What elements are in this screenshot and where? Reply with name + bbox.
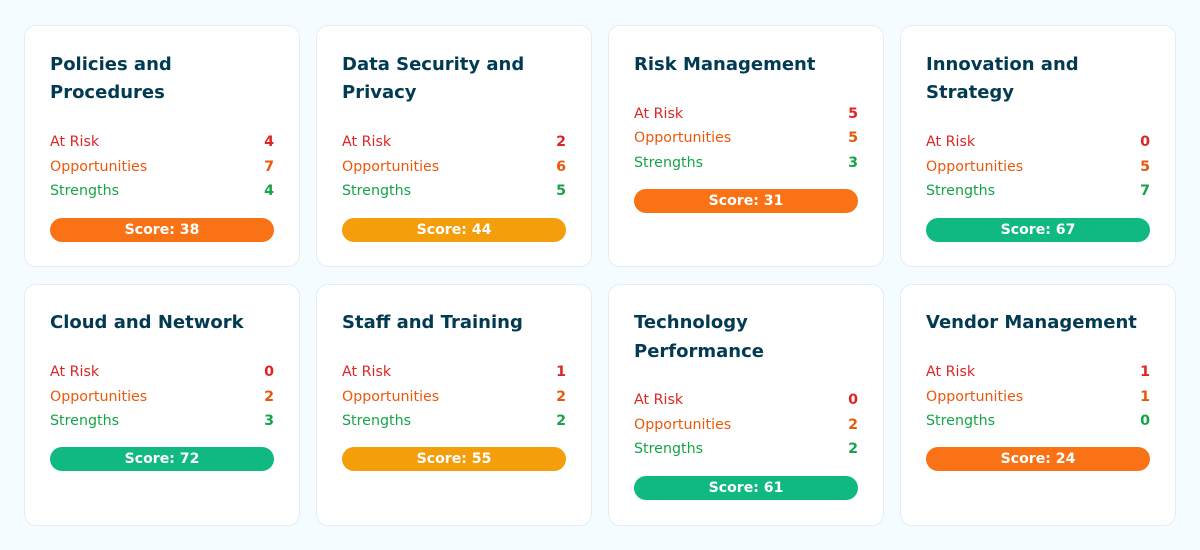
panel: Policies and Procedures	[24, 25, 300, 267]
panel: Data Security and Privacy: 6	[556, 159, 566, 175]
panel: Technology Performance: 2	[848, 417, 858, 433]
panel: Innovation and Strategy: Score: 67	[1001, 222, 1075, 238]
panel: Data Security and Privacy	[316, 25, 592, 267]
panel: Data Security and Privacy: At Risk	[342, 134, 391, 150]
panel: Technology Performance	[608, 284, 884, 526]
panel: Risk Management: At Risk	[634, 106, 683, 122]
panel: Vendor Management: 0	[1140, 413, 1150, 429]
panel: Risk Management: Strengths	[634, 155, 703, 171]
panel: Data Security and Privacy: Score: 44	[417, 222, 491, 238]
panel: Vendor Management: Vendor Management	[926, 312, 1137, 333]
panel: Innovation and Strategy: Opportunities	[926, 159, 1023, 175]
panel: Staff and Training: Opportunities	[342, 389, 439, 405]
panel: Staff and Training: 1	[556, 364, 566, 380]
panel: Data Security and Privacy: 5	[556, 183, 566, 199]
panel: Staff and Training	[316, 284, 592, 526]
panel: Innovation and Strategy: 0	[1140, 134, 1150, 150]
panel: Vendor Management: Score: 24	[1001, 451, 1075, 467]
panel: Cloud and Network: 2	[264, 389, 274, 405]
panel: Vendor Management: 1	[1140, 389, 1150, 405]
panel: Risk Management	[608, 25, 884, 267]
panel: Innovation and Strategy: Strengths	[926, 183, 995, 199]
panel: Policies and Procedures: 4	[264, 134, 274, 150]
panel: Cloud and Network: At Risk	[50, 364, 99, 380]
panel: Policies and Procedures: At Risk	[50, 134, 99, 150]
panel: Staff and Training: 2	[556, 413, 566, 429]
panel: Innovation and Strategy	[900, 25, 1176, 267]
panel: Vendor Management: At Risk	[926, 364, 975, 380]
panel: Risk Management: Score: 31	[709, 193, 783, 209]
panel: Staff and Training: Score: 55	[417, 451, 491, 467]
panel: Technology Performance: 0	[848, 392, 858, 408]
panel: Vendor Management: Strengths	[926, 413, 995, 429]
panel: Cloud and Network: Strengths	[50, 413, 119, 429]
panel: Staff and Training: 2	[556, 389, 566, 405]
panel: Risk Management: 5	[848, 130, 858, 146]
panel: Technology Performance: 2	[848, 441, 858, 457]
panel: Risk Management: Risk Management	[634, 54, 815, 75]
panel: Innovation and Strategy: At Risk	[926, 134, 975, 150]
panel: Technology Performance: Technology Performance	[634, 312, 764, 362]
panel: Cloud and Network: Opportunities	[50, 389, 147, 405]
panel: Policies and Procedures: 4	[264, 183, 274, 199]
panel: Innovation and Strategy: Innovation and Strategy	[926, 54, 1079, 103]
panel: Risk Management: 5	[848, 106, 858, 122]
panel: Risk Management: Opportunities	[634, 130, 731, 146]
panel: Technology Performance: Score: 61	[709, 480, 783, 496]
panel: Data Security and Privacy: Strengths	[342, 183, 411, 199]
panel: Cloud and Network: Score: 72	[125, 451, 199, 467]
panel: Cloud and Network: 3	[264, 413, 274, 429]
panel: Vendor Management: 1	[1140, 364, 1150, 380]
panel: Cloud and Network: 0	[264, 364, 274, 380]
panel: Technology Performance: At Risk	[634, 392, 683, 408]
panel: Vendor Management	[900, 284, 1176, 526]
panel: Data Security and Privacy: Data Security and Privacy	[342, 54, 524, 103]
panel: Cloud and Network: Cloud and Network	[50, 312, 244, 333]
panel: Policies and Procedures: Policies and Procedures	[50, 54, 172, 103]
panel: Innovation and Strategy: 7	[1140, 183, 1150, 199]
panel: Policies and Procedures: 7	[264, 159, 274, 175]
panel: Policies and Procedures: Strengths	[50, 183, 119, 199]
panel: Staff and Training: Staff and Training	[342, 312, 523, 333]
panel: Cloud and Network	[24, 284, 300, 526]
panel: Policies and Procedures: Score: 38	[125, 222, 199, 238]
panel: Policies and Procedures: Opportunities	[50, 159, 147, 175]
panel: Data Security and Privacy: 2	[556, 134, 566, 150]
panel: Technology Performance: Strengths	[634, 441, 703, 457]
panel: Risk Management: 3	[848, 155, 858, 171]
panel: Technology Performance: Opportunities	[634, 417, 731, 433]
panel: Innovation and Strategy: 5	[1140, 159, 1150, 175]
panel: Staff and Training: Strengths	[342, 413, 411, 429]
panel: Vendor Management: Opportunities	[926, 389, 1023, 405]
panel: Data Security and Privacy: Opportunities	[342, 159, 439, 175]
panel: Staff and Training: At Risk	[342, 364, 391, 380]
